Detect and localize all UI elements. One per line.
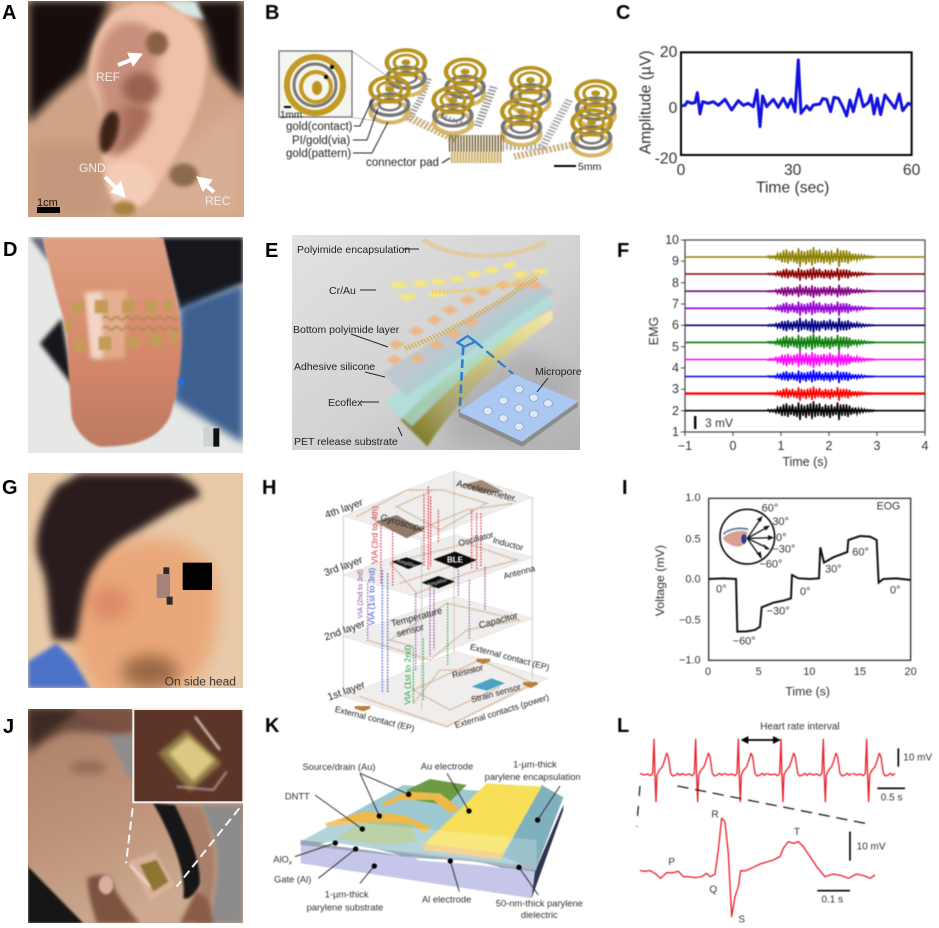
- step chart: 0.5: [685, 533, 701, 545]
- ECG chart: 0.5 s: [881, 792, 902, 803]
- text: VIA (1st to 3rd): [367, 568, 377, 626]
- inset: single electrode: [279, 51, 352, 121]
- multi-channel chart: 7: [672, 297, 679, 311]
- chips: [355, 480, 537, 710]
- text: VIA (2nd to 3rd): [357, 570, 364, 618]
- multi-channel chart: 3 mV: [705, 416, 733, 430]
- multi-channel chart: 5: [672, 340, 679, 354]
- Cr/Au pads: [390, 262, 548, 300]
- ECG chart: T: [794, 827, 800, 838]
- panel J: chest photo with patch: [3, 709, 243, 923]
- layered illustration: [292, 235, 580, 450]
- text: VIA (3rd to 4th): [370, 506, 380, 564]
- line chart: Amplitude (µV): [638, 50, 655, 154]
- line chart: 0: [669, 100, 678, 117]
- step chart: 0: [705, 666, 711, 678]
- multi-channel chart: 9: [672, 254, 679, 268]
- step chart: −30°: [772, 544, 795, 556]
- step chart: Time (s): [785, 684, 830, 698]
- device illustration: x: [288, 860, 293, 867]
- panel G: side head photo with device: [2, 473, 243, 697]
- device illustration: Gate (Al): [274, 875, 311, 885]
- photo of arm: [28, 237, 243, 453]
- multi-channel chart: 4: [922, 439, 929, 453]
- step chart: 0°: [776, 532, 787, 544]
- layer labels: Ecoflex: [328, 397, 363, 409]
- panel K: transistor cross-section: [265, 715, 583, 920]
- text: Temperature: [390, 605, 443, 629]
- step chart: −1.0: [679, 654, 701, 666]
- multi-channel chart: 0: [730, 439, 737, 453]
- photo of head: [28, 473, 243, 697]
- device illustration: parylene substrate: [307, 903, 383, 913]
- step chart: 60°: [852, 546, 869, 558]
- device illustration: AlO: [273, 855, 289, 865]
- arrow: GND: [105, 177, 125, 197]
- micropore slab: [459, 402, 578, 447]
- pointer lines: [295, 773, 560, 895]
- label GND: GND: [79, 161, 106, 175]
- electrode array: [352, 50, 615, 157]
- step chart: 60°: [762, 503, 778, 515]
- multi-channel chart: 2: [672, 404, 679, 418]
- text: External contact (EP): [334, 704, 416, 734]
- scale bar 5 mm: 5mm: [578, 161, 602, 173]
- text: BLE: [447, 555, 464, 564]
- text: Amplifier: [396, 558, 418, 570]
- serpentine: [405, 277, 537, 348]
- VIA lines: [368, 487, 485, 703]
- ECG chart: 10 mV: [857, 841, 886, 852]
- label A: A: [2, 2, 16, 24]
- step chart: 0.0: [685, 573, 701, 585]
- step chart: EOG: [877, 500, 900, 512]
- multi-channel chart: Time (s): [782, 455, 828, 469]
- device illustration: dielectric: [521, 910, 558, 920]
- step chart: −30°: [767, 606, 790, 618]
- arrow: REC: [197, 177, 214, 192]
- device illustration: [273, 759, 583, 920]
- multi-channel chart: 8: [672, 276, 679, 290]
- label B: B: [265, 2, 279, 24]
- bottom polyimide pads: [386, 280, 543, 365]
- layer labels: Bottom polyimide layer: [293, 324, 400, 336]
- step chart: 0°: [716, 583, 727, 595]
- step chart: −60°: [759, 559, 782, 571]
- photo of chest: [28, 709, 243, 923]
- layer labels: [293, 244, 582, 448]
- label J: J: [3, 716, 14, 738]
- step chart: Voltage (mV): [653, 545, 667, 616]
- step chart: 30°: [772, 516, 789, 528]
- step chart: 0°: [800, 586, 810, 598]
- multi-channel chart: 3: [874, 439, 881, 453]
- line chart: Time (sec): [756, 179, 829, 196]
- multi-channel chart: 3: [672, 382, 679, 396]
- text: Accelerometer.: [455, 478, 518, 504]
- line chart: -20: [655, 150, 678, 167]
- Ecoflex sheet: [385, 292, 555, 427]
- device illustration: DNTT: [285, 791, 310, 801]
- step chart: 30°: [825, 564, 842, 576]
- text: External contact (EP): [469, 642, 551, 673]
- line chart: 0: [677, 162, 686, 179]
- panel A: ear photo with electrodes: [2, 1, 244, 217]
- text: 2nd layer: [323, 618, 367, 643]
- line chart: [638, 44, 921, 196]
- layer labels: Polyimide encapsulation: [297, 244, 410, 256]
- step chart: 0°: [890, 585, 900, 597]
- scale bar 1 cm: [37, 197, 60, 213]
- eye inset: [720, 509, 775, 564]
- panel B: serpentine gold electrode array: [265, 2, 615, 173]
- device illustration: Source/drain (Au): [302, 762, 376, 772]
- label L: L: [617, 715, 629, 737]
- text: 3rd layer: [323, 555, 365, 579]
- text: Inductor: [492, 535, 525, 553]
- layer labels: [286, 100, 388, 160]
- label E: E: [265, 240, 278, 262]
- zoom box: [457, 336, 475, 347]
- label H: H: [262, 477, 276, 499]
- label K: K: [265, 715, 280, 737]
- line chart: 60: [903, 162, 921, 179]
- label D: D: [3, 239, 17, 261]
- ECG chart: S: [738, 915, 745, 926]
- text: sensor: [395, 622, 425, 639]
- traces: [357, 490, 533, 727]
- device illustration: parylene encapsulation: [485, 772, 581, 782]
- step chart: [653, 492, 917, 698]
- label C: C: [616, 2, 630, 24]
- multi-channel chart: 10: [665, 233, 679, 247]
- device illustration: Au electrode: [421, 761, 473, 771]
- panel H: four-layer circuit diagram: [262, 471, 551, 734]
- panel C: EEG amplitude chart: [616, 2, 921, 196]
- ECG chart: [637, 721, 933, 926]
- text: Amplifier: [427, 577, 448, 589]
- step chart: 1.0: [685, 492, 701, 504]
- step chart: 5: [756, 666, 762, 678]
- label: connector pad: connector pad: [366, 157, 439, 169]
- device illustration: 50-nm-thick parylene: [496, 899, 583, 909]
- label I: I: [622, 477, 628, 499]
- device illustration: 1-µm-thick: [325, 890, 369, 900]
- multi-channel chart: 2: [826, 439, 833, 453]
- label REC: REC: [205, 194, 231, 208]
- label G: G: [2, 477, 18, 499]
- text: [323, 478, 551, 734]
- step chart: 10: [803, 666, 815, 678]
- ECG chart: Q: [709, 884, 717, 895]
- PET substrate: [401, 310, 552, 447]
- device illustration: 1-µm-thick: [513, 759, 557, 769]
- layer labels: PET release substrate: [294, 436, 398, 448]
- label F: F: [617, 240, 629, 262]
- step chart: 20: [905, 666, 917, 678]
- layer labels: Micropore: [535, 366, 582, 378]
- ECG chart: Heart rate interval: [760, 721, 840, 732]
- inset close-up of patch: [133, 709, 243, 802]
- device illustration: Al electrode: [422, 895, 471, 905]
- layer labels: PI/gold(via): [292, 135, 350, 147]
- line chart: 20: [660, 44, 678, 61]
- multi-channel chart: EMG: [647, 317, 661, 345]
- panel I: EOG voltage chart: [622, 477, 917, 698]
- scale bar 5 mm: [554, 161, 602, 173]
- photo of ear: [28, 1, 244, 217]
- panel E: exploded layers of EMG patch: [265, 235, 582, 450]
- multi-channel chart: −1: [678, 439, 692, 453]
- slab shadow: [436, 347, 579, 447]
- layer labels: gold(pattern): [286, 148, 351, 160]
- text: 1st layer: [326, 680, 367, 703]
- line chart: 30: [784, 162, 802, 179]
- layer labels: Adhesive silicone: [294, 361, 375, 373]
- panel D: arm photo with EMG array: [3, 237, 243, 453]
- step chart: −0.5: [679, 614, 701, 626]
- text: Gyroscope: [379, 512, 426, 534]
- text: 4th layer: [324, 497, 365, 521]
- photo of head: On side head: [165, 674, 236, 688]
- panel L: ECG traces: [617, 715, 933, 926]
- label REF: REF: [96, 70, 120, 84]
- dashed zoom lines: [126, 808, 239, 887]
- text: VIA (1st to 2nd): [402, 645, 412, 705]
- stacked layers: [323, 471, 551, 734]
- text: Capacitor: [478, 610, 519, 630]
- arrow: REF: [118, 53, 142, 66]
- scale bar 1 cm: 1cm: [37, 197, 58, 209]
- ECG chart: P: [668, 857, 675, 868]
- inset: single electrode: 1mm: [280, 110, 302, 121]
- text: Strain sensor: [470, 682, 522, 705]
- multi-channel chart: 4: [672, 361, 679, 375]
- layer labels: gold(contact): [286, 121, 353, 133]
- polyimide encapsulation ribbon: [423, 240, 546, 256]
- text: Resistor: [451, 662, 484, 680]
- text: External contacts (power): [453, 692, 550, 730]
- ECG chart: 0.1 s: [821, 895, 843, 906]
- multi-channel chart: 6: [672, 318, 679, 332]
- panel F: EMG traces chart: [617, 233, 929, 469]
- adhesive silicone sheet: [383, 280, 555, 397]
- text: Oscillator: [457, 529, 495, 548]
- multi-channel chart: 1: [672, 425, 679, 439]
- ECG chart: 10 mV: [903, 752, 933, 763]
- multi-channel chart: 1: [778, 439, 785, 453]
- step chart: −60°: [733, 636, 756, 648]
- layer labels: Cr/Au: [329, 285, 356, 297]
- text: Antenna: [502, 563, 536, 581]
- multi-channel chart: [647, 233, 929, 469]
- step chart: 15: [854, 666, 866, 678]
- ECG chart: R: [711, 809, 719, 820]
